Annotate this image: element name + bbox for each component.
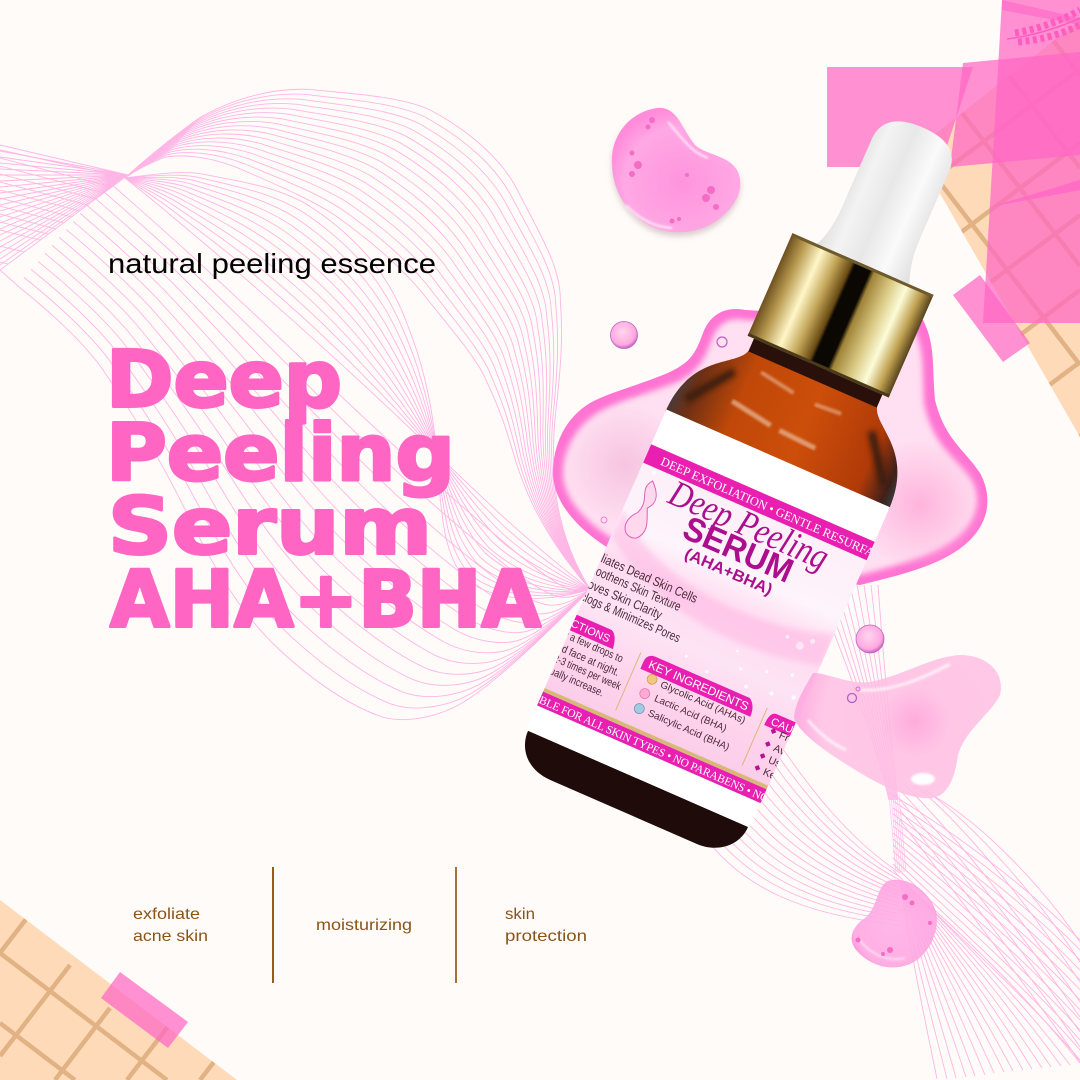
label swoosh [611,510,834,666]
benefit: exfoliate: exfoliate [133,906,200,923]
droplet: bottom [852,880,937,967]
label heading: (AHA+BHA) [682,546,775,599]
benefit: skin protection: protection [505,928,587,945]
title [106,336,541,646]
benefit labels with dividers [133,867,587,983]
divider [455,867,457,983]
droplet: top [612,108,740,236]
dropper bulb [814,107,970,288]
top right peach grid panel [936,24,1080,437]
label directions [550,614,622,696]
title: Deep [106,336,342,426]
label heading: Deep Peeling [662,472,835,578]
label sparkles [652,470,815,700]
label dividers [616,653,767,766]
label top band: DEEP EXFOLIATION • GENTLE RESURFACING [659,454,904,572]
label bottom band: BLE FOR ALL SKIN TYPES • NO PARABENS • NO SILICONES [537,694,826,830]
label benefits: Unclogs & Minimizes Pores [567,584,683,645]
label benefits: Exfoliates Dead Skin Cells [579,542,700,606]
title: Peeling [106,409,455,499]
label cautions [754,714,796,778]
subtitle: natural peeling essence [108,248,436,279]
benefit: exfoliate [133,906,208,945]
flowing line pattern: loop [0,0,763,778]
label benefits [582,553,697,642]
bottom left peach grid panel [0,900,237,1080]
label [528,410,890,827]
bottle [524,121,952,848]
divider [272,867,274,983]
label ingredients: Lactic Acid (BHA) [652,693,728,735]
benefit: exfoliate: acne skin [133,928,208,945]
label ingredients: Glycolic Acid (AHAs) [658,680,747,726]
amber glass body [665,314,932,510]
label cautions: CAUTIONS [769,716,826,750]
bubble: small right [856,625,884,653]
label heading: SERUM [677,509,799,591]
title: AHA+BHA [110,556,541,646]
label cautions: Fragrance [777,729,826,760]
label bottom band [537,688,768,803]
label ingredients: Salicylic Acid (BHA) [646,708,731,753]
droplet: right [794,655,1001,798]
label ingredients [634,656,752,752]
label directions: Use 2-3 times per week [535,646,623,693]
label cautions: Keep Away [761,766,815,798]
label directions: cleansed face at night. [530,630,621,679]
label directions: Apply a few drops to [545,621,625,665]
flowing line pattern: lower right [700,585,1080,1079]
label benefits: Improves Skin Clarity [566,568,665,622]
benefit: moisturizing: moisturizing [316,917,412,934]
dark glass base [514,725,751,860]
serum splash behind bottle [550,300,990,590]
label directions: DIRECTIONS [545,607,612,645]
label top band [643,444,875,560]
pink tape, bottom left [101,972,188,1048]
label directions: Gradually increase. [529,657,606,699]
title: Serum [108,482,432,572]
label benefits: Smoothens Skin Texture [580,558,683,614]
benefit: skin protection: skin [505,906,535,923]
bubble: small left [610,322,638,348]
icon: leaf sprig [1007,10,1080,42]
benefit: skin protection [505,906,587,945]
gold collar [748,233,934,397]
label cautions: Use SPF [766,754,810,782]
label cautions: Avoid Sun [771,742,820,772]
icon: label droplet [624,480,657,539]
pink translucent tape shapes, top right [827,0,1080,362]
label ingredients: KEY INGREDIENTS [646,657,751,713]
